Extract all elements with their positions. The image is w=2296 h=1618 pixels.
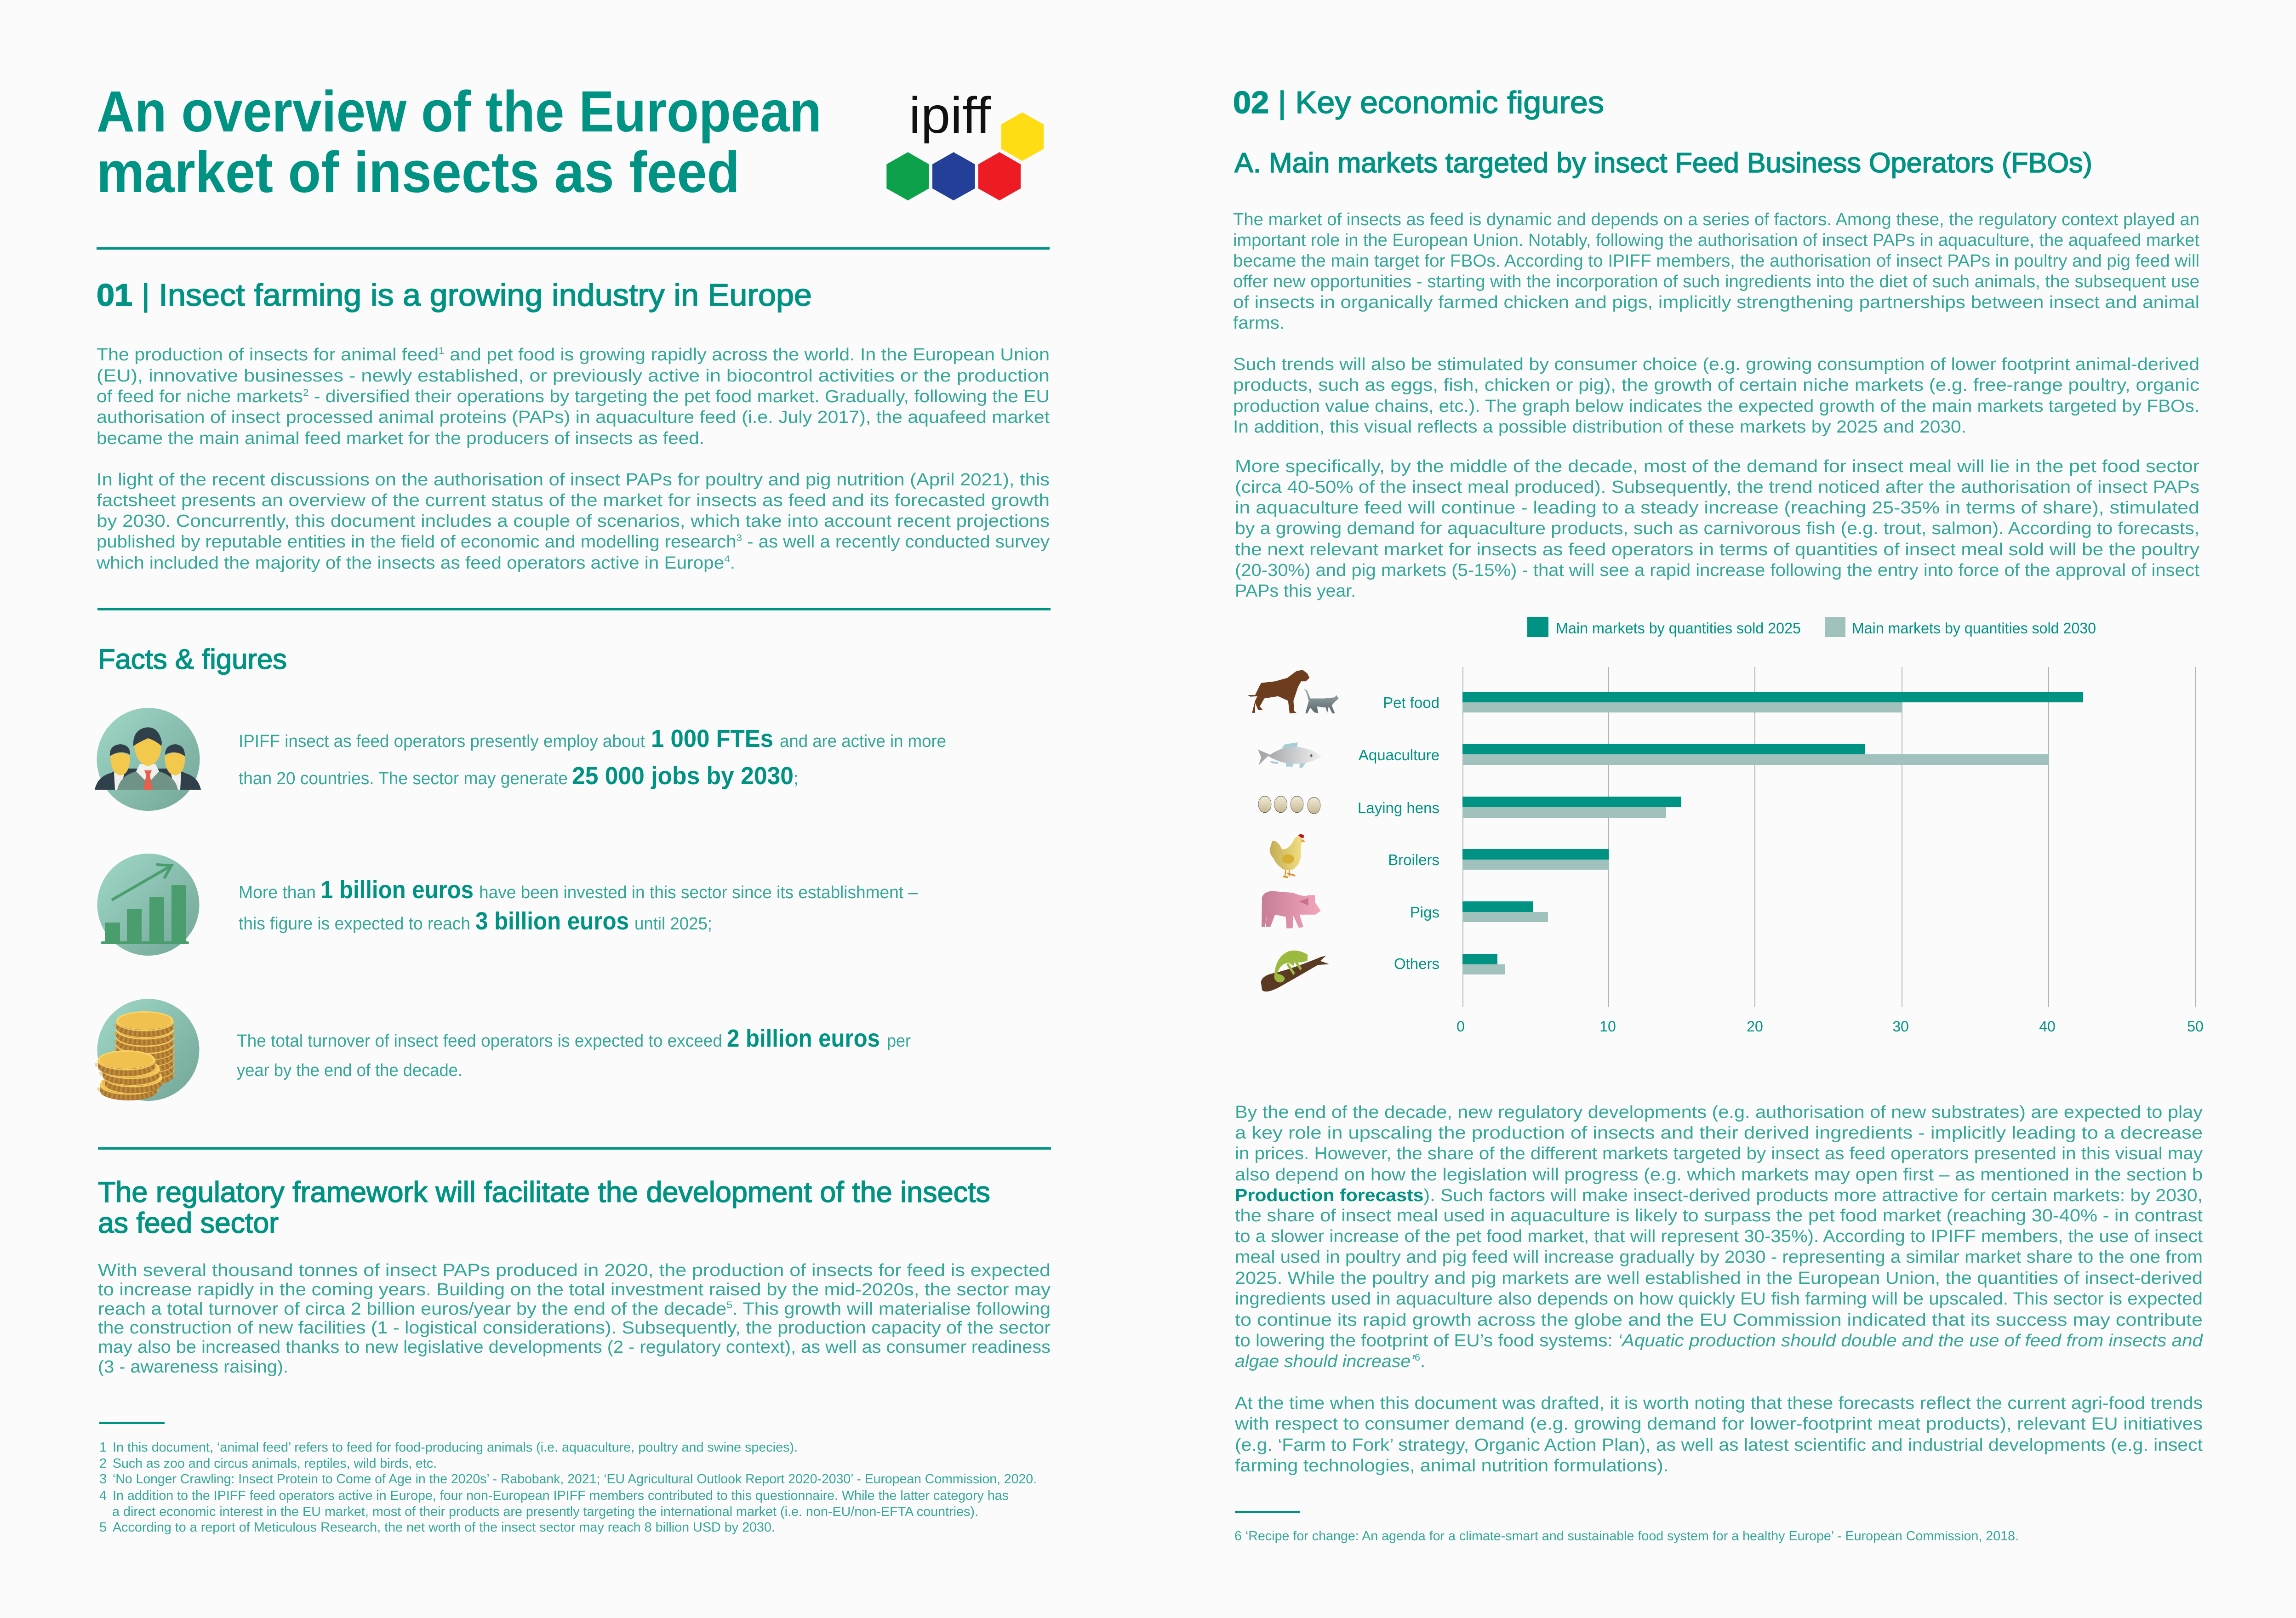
chart legend: Main markets by quantities sold 2030 [1852, 620, 2096, 637]
text block: introduction paragraph 2: published by reputable entities in the field of economic and modelling research [97, 532, 703, 552]
text block: regulatory framework paragraph [98, 1261, 1051, 1377]
text block: market paragraph 4: ingredients used in aquaculture also depends on how quickly EU fish farming will be upscaled. This sector is expected [1235, 1289, 2203, 1309]
heading: facts and figures: Facts & figures [98, 644, 287, 675]
text block: regulatory framework paragraph: . This growth will materialise following [732, 1299, 1051, 1319]
text block: introduction paragraph 2 [96, 470, 1050, 573]
text block: turnover fact: per [887, 1031, 911, 1051]
text block: market paragraph 4: algae should increase’ [1235, 1352, 1415, 1371]
category labels: Pet food [1383, 694, 1439, 711]
footnote: right page: 6 ‘Recipe for change: An agenda for a climate-smart and sustainable food system for a healthy Europe’ - European Commission, 2018. [1234, 1529, 2019, 1544]
text block: regulatory framework paragraph: to increase rapidly in the coming years. Building on the total investment raised by the mid-2020s, the sector may [98, 1280, 1051, 1299]
text block: jobs fact: than 20 countries. The sector may generate [239, 769, 568, 788]
footnotes: left page: In addition to the IPIFF feed operators active in Europe, four non-European IPIFF members contributed to this questionnaire. While the latter category has [113, 1488, 1009, 1503]
text block: market paragraph 2 [1233, 355, 2199, 437]
text block: market paragraph 1: farms. [1233, 313, 1285, 333]
footnotes: left page: 2 [99, 1456, 107, 1471]
title: An overview of the European [97, 79, 822, 144]
footnotes: left page: Such as zoo and circus animals, reptiles, wild birds, etc. [113, 1456, 437, 1471]
footnotes: left page: ‘No Longer Crawling: Insect Protein to Come of Age in the 2020s’ - Rabobank, 2021; ‘EU Agricultural Outlook Report 2020-2030’ - European Commission, 2020. [113, 1472, 1037, 1487]
text block: introduction paragraph 1: of feed for niche markets [97, 387, 289, 406]
icon: chicken [1270, 834, 1305, 877]
text block: introduction paragraph 2: . [730, 553, 735, 573]
text block: introduction paragraph 1: (EU), innovative businesses - newly established, or previously active in biocontrol activities or the production [97, 366, 1050, 386]
footnotes: left page: 4 [99, 1488, 107, 1503]
text block: jobs fact: ; [794, 769, 799, 788]
text block: jobs fact [239, 725, 946, 790]
text block: market paragraph 5 [1234, 1394, 2203, 1476]
text block: introduction paragraph 2: In light of the recent discussions on the authorisation of insect PAPs for poultry and pig nutrition (April 2021), this [97, 470, 1050, 490]
heading: section 01: 01 | Insect farming is a growing industry in Europe [97, 278, 812, 313]
text block: market paragraph 3: (20-30%) and pig markets (5-15%) - that will see a rapid increase following the entry into force of the approval of insect [1235, 561, 2199, 580]
text block: market paragraph 4: to continue its rapid growth across the globe and the EU Commission indicated that its success may contribute [1235, 1310, 2203, 1330]
text block: market paragraph 4: meal used in poultry and pig feed will increase gradually by 2030 - representing a similar market share to the one from [1235, 1248, 2203, 1267]
text block: introduction paragraph 1: became the main animal feed market for the producers of insects as feed. [97, 429, 704, 448]
text block: introduction paragraph 2: which included the majority of the insects as feed operators active in Europe [97, 553, 685, 573]
text block: market paragraph 1: of insects in organically farmed chicken and pigs, implicitly strengthening partnerships between insect and animal [1233, 293, 2199, 312]
text block: investment fact: this figure is expected to reach [239, 914, 470, 934]
text block: introduction paragraph 1: authorisation of insect processed animal proteins (PAPs) in aquaculture feed (i.e. July 2017), the aquafeed market [97, 408, 1050, 427]
category labels: Pigs [1410, 904, 1439, 921]
footnotes: left page: In this document, ‘animal feed’ refers to feed for food-producing animals (i.e. aquaculture, poultry and swine species). [113, 1440, 798, 1455]
text block: investment fact: 3 billion euros [475, 907, 629, 935]
footnotes: left page: a direct economic interest in the EU market, most of their products are presently targeting the international market (i.e. non-EU/non-EFTA countries). [112, 1504, 978, 1519]
text block: market paragraph 4: 6 [1415, 1352, 1420, 1363]
footnotes: left page: 3 [99, 1472, 107, 1487]
category labels: Others [1394, 955, 1439, 972]
text block: market paragraph 4: the share of insect meal used in aquaculture is likely to surpass the pet food market (reaching 30-40% - in contrast [1235, 1206, 2203, 1225]
text block: investment fact [239, 876, 918, 935]
text block: introduction paragraph 1: The production of insects for animal feed [97, 345, 412, 365]
text block: regulatory framework paragraph: reach a total turnover of circa 2 billion euros/year by the end of the decade [98, 1299, 673, 1319]
text block: turnover fact: year by the end of the decade. [237, 1061, 463, 1080]
text block: turnover fact: The total turnover of insect feed operators is expected to exceed [237, 1031, 722, 1051]
text block: regulatory framework paragraph: the construction of new facilities (1 - logistical considerations). Subsequently, the production capacity of the sector [98, 1318, 1051, 1338]
bars: laying hens [1462, 797, 1681, 818]
title [97, 79, 822, 205]
text block: market paragraph 1: became the main target for FBOs. According to IPIFF members, the authorisation of insect PAPs in poultry and pig feed will [1233, 251, 2199, 271]
axis values [1456, 1018, 2204, 1035]
text block: investment fact: have been invested in this sector since its establishment – [479, 883, 918, 902]
text block: introduction paragraph 1: - diversified their operations by targeting the pet food market. Gradually, following the EU [309, 387, 1050, 406]
text block: market paragraph 4: in prices. However, the share of the different markets targeted by insect as feed operators presented in this visual may [1235, 1144, 2203, 1163]
icon: growth chart [97, 854, 200, 956]
text block: turnover fact: 2 billion euros [727, 1025, 880, 1052]
text block: market paragraph 3: in aquaculture feed will continue - leading to a steady increase (reaching 25-35% in terms of share), stimulated [1235, 498, 2199, 518]
text block: regulatory framework paragraph: (3 - awareness raising). [98, 1357, 288, 1377]
icon: business people [95, 708, 201, 811]
bar chart: main markets [1358, 667, 2204, 1035]
text block: market paragraph 1 [1233, 210, 2199, 333]
text block: market paragraph 3: More specifically, by the middle of the decade, most of the demand for insect meal will lie in the pet food sector [1235, 457, 2199, 476]
text block: introduction paragraph 1: 2 [303, 387, 309, 398]
category labels: Laying hens [1358, 799, 1439, 816]
text block: market paragraph 2: In addition, this visual reflects a possible distribution of these markets by 2025 and 2030. [1233, 417, 1966, 437]
text block: market paragraph 3: (circa 40-50% of the insect meal produced). Subsequently, the trend noticed after the authorisation of insect PAPs [1235, 478, 2199, 497]
icon: ipiff logo [886, 87, 1044, 200]
text block: jobs fact: 1 000 FTEs [651, 725, 773, 752]
footnotes: left page [99, 1440, 1037, 1535]
text block: introduction paragraph 2: - as well a recently conducted survey [742, 532, 1050, 552]
text block: market paragraph 2: production value chains, etc.). The graph below indicates the expected growth of the main markets targeted by FBOs. [1233, 397, 2199, 416]
text block: market paragraph 4: to a slower increase of the pet food market, that will represent 30-35%). According to IPIFF members, the use of insect [1235, 1227, 2203, 1246]
text block: market paragraph 4: a key role in upscaling the production of insects and their derived ingredients - implicitly leading to a decrease [1235, 1123, 2203, 1143]
chart legend [1527, 617, 2096, 637]
footnotes: left page: 1 [99, 1440, 107, 1455]
chart legend: Main markets by quantities sold 2025 [1556, 620, 1801, 637]
category labels: Aquaculture [1359, 746, 1439, 763]
text block: market paragraph 2: products, such as eggs, fish, chicken or pig), the growth of certain niche markets (e.g. free-range poultry, organic [1233, 376, 2199, 395]
text block: market paragraph 4: Production forecasts ). Such factors will make insect-derived products more attractive for certain markets: by 2030, [1235, 1186, 2203, 1205]
axis values: 50 [2187, 1018, 2204, 1035]
bars: pigs [1462, 901, 1548, 922]
heading: regulatory framework [98, 1176, 990, 1239]
icon: gold coins [97, 999, 200, 1101]
text block: market paragraph 3: the next relevant market for insects as feed operators in terms of quantities of insect meal sold will be the poultry [1235, 540, 2199, 559]
text block: introduction paragraph 2: by 2030. Concurrently, this document includes a couple of scenarios, which take into account recent projections [97, 512, 1050, 531]
text block: introduction paragraph 1: and pet food is growing rapidly across the world. In the European Union [445, 345, 1050, 365]
text block: investment fact: until 2025; [634, 914, 712, 934]
text block: market paragraph 2: Such trends will also be stimulated by consumer choice (e.g. growing consumption of lower footprint animal-derived [1233, 355, 2199, 374]
text block: jobs fact: IPIFF insect as feed operators presently employ about [239, 732, 645, 751]
icon: dog and cat [1247, 670, 1339, 713]
text block: investment fact: 1 billion euros [320, 876, 474, 904]
text block: market paragraph 3 [1235, 457, 2199, 601]
axis values: 40 [2039, 1018, 2056, 1035]
text block: jobs fact: and are active in more [780, 732, 946, 751]
icon: pig [1262, 891, 1321, 929]
heading: main markets: A. Main markets targeted by insect Feed Business Operators (FBOs) [1234, 147, 2092, 178]
text block: market paragraph 3: PAPs this year. [1235, 581, 1356, 601]
bars: others [1462, 954, 1505, 974]
category labels [1358, 694, 1439, 972]
text block: regulatory framework paragraph: 5 [726, 1300, 732, 1310]
text block: market paragraph 5: At the time when this document was drafted, it is worth noting that these forecasts reflect the current agri-food trends [1235, 1394, 2203, 1413]
text block: market paragraph 1: offer new opportunities - starting with the incorporation of such ingredients into the diet of such animals, the subsequent use [1233, 272, 2199, 291]
title: market of insects as feed [97, 140, 740, 205]
text block: market paragraph 4 [1235, 1103, 2204, 1371]
heading: regulatory framework: The regulatory framework will facilitate the development of the insects [98, 1176, 990, 1208]
text block: market paragraph 1: The market of insects as feed is dynamic and depends on a series of factors. Among these, the regulatory context played an [1233, 210, 2199, 229]
text block: market paragraph 5: (e.g. ‘Farm to Fork’ strategy, Organic Action Plan), as well as latest scientific and industrial developments (e.g. insect [1235, 1436, 2203, 1455]
text block: investment fact: More than [239, 883, 316, 902]
axis values: 30 [1892, 1018, 1909, 1035]
bars: aquaculture [1462, 744, 2049, 765]
text block: market paragraph 1: important role in the European Union. Notably, following the authorisation of insect PAPs in aquaculture, the aquafeed market [1233, 231, 2199, 250]
icon: fish [1258, 742, 1322, 768]
text block: regulatory framework paragraph: With several thousand tonnes of insect PAPs produced in 2020, the production of insects for feed is expected [98, 1261, 1051, 1280]
icon: eggs [1258, 796, 1320, 814]
text block: market paragraph 5: with respect to consumer demand (e.g. growing demand for lower-footprint meat products), relevant EU initiatives [1234, 1414, 2203, 1434]
bars: pet food [1462, 692, 2083, 712]
footnotes: left page: According to a report of Meticulous Research, the net worth of the insect sector may reach 8 billion USD by 2030. [113, 1520, 775, 1535]
heading: regulatory framework: as feed sector [98, 1207, 279, 1239]
text block: introduction paragraph 1 [97, 345, 1050, 448]
bars: broilers [1462, 849, 1609, 870]
axis values: 0 [1456, 1018, 1465, 1035]
icon: ipiff logo: ipiff [909, 87, 991, 144]
icon: chameleon on branch [1261, 951, 1330, 991]
text block: market paragraph 4: 2025. While the poultry and pig markets are well established in the European Union, the quantities of insect-derived [1235, 1269, 2203, 1288]
text block: introduction paragraph 2: factsheet presents an overview of the current status of the market for insects as feed and its forecasted growth [97, 491, 1050, 510]
text block: market paragraph 5: farming technologies, animal nutrition formulations). [1235, 1456, 1668, 1476]
category labels: Broilers [1388, 851, 1439, 868]
text block: introduction paragraph 2: 4 [724, 554, 730, 564]
axis values: 20 [1747, 1018, 1763, 1035]
text block: regulatory framework paragraph: may also be increased thanks to new legislative developments (2 - regulatory context), as well as consumer readiness [98, 1338, 1051, 1357]
footnotes: left page: 5 [99, 1520, 107, 1535]
text block: market paragraph 4: By the end of the decade, new regulatory developments (e.g. authorisation of new substrates) are expected to play [1235, 1103, 2203, 1122]
text block: market paragraph 4: . [1420, 1352, 1425, 1371]
text block: jobs fact: 25 000 jobs by 2030 [572, 762, 794, 790]
heading: section 02: 02 | Key economic figures [1233, 85, 1604, 120]
axis values: 10 [1599, 1018, 1616, 1035]
text block: introduction paragraph 1: 1 [439, 346, 445, 356]
text block: market paragraph 3: by a growing demand for aquaculture products, such as carnivorous fish (e.g. trout, salmon). According to forecasts, [1235, 519, 2199, 538]
text block: market paragraph 4: also depend on how the legislation will progress (e.g. which markets may open first – as mentioned in the section b [1235, 1165, 2203, 1185]
text block: turnover fact [237, 1025, 911, 1080]
text block: introduction paragraph 2: 3 [737, 533, 742, 543]
text block: market paragraph 4: to lowering the footprint of EU’s food systems: ‘Aquatic production should double and the use of feed from insects and [1235, 1331, 2204, 1350]
